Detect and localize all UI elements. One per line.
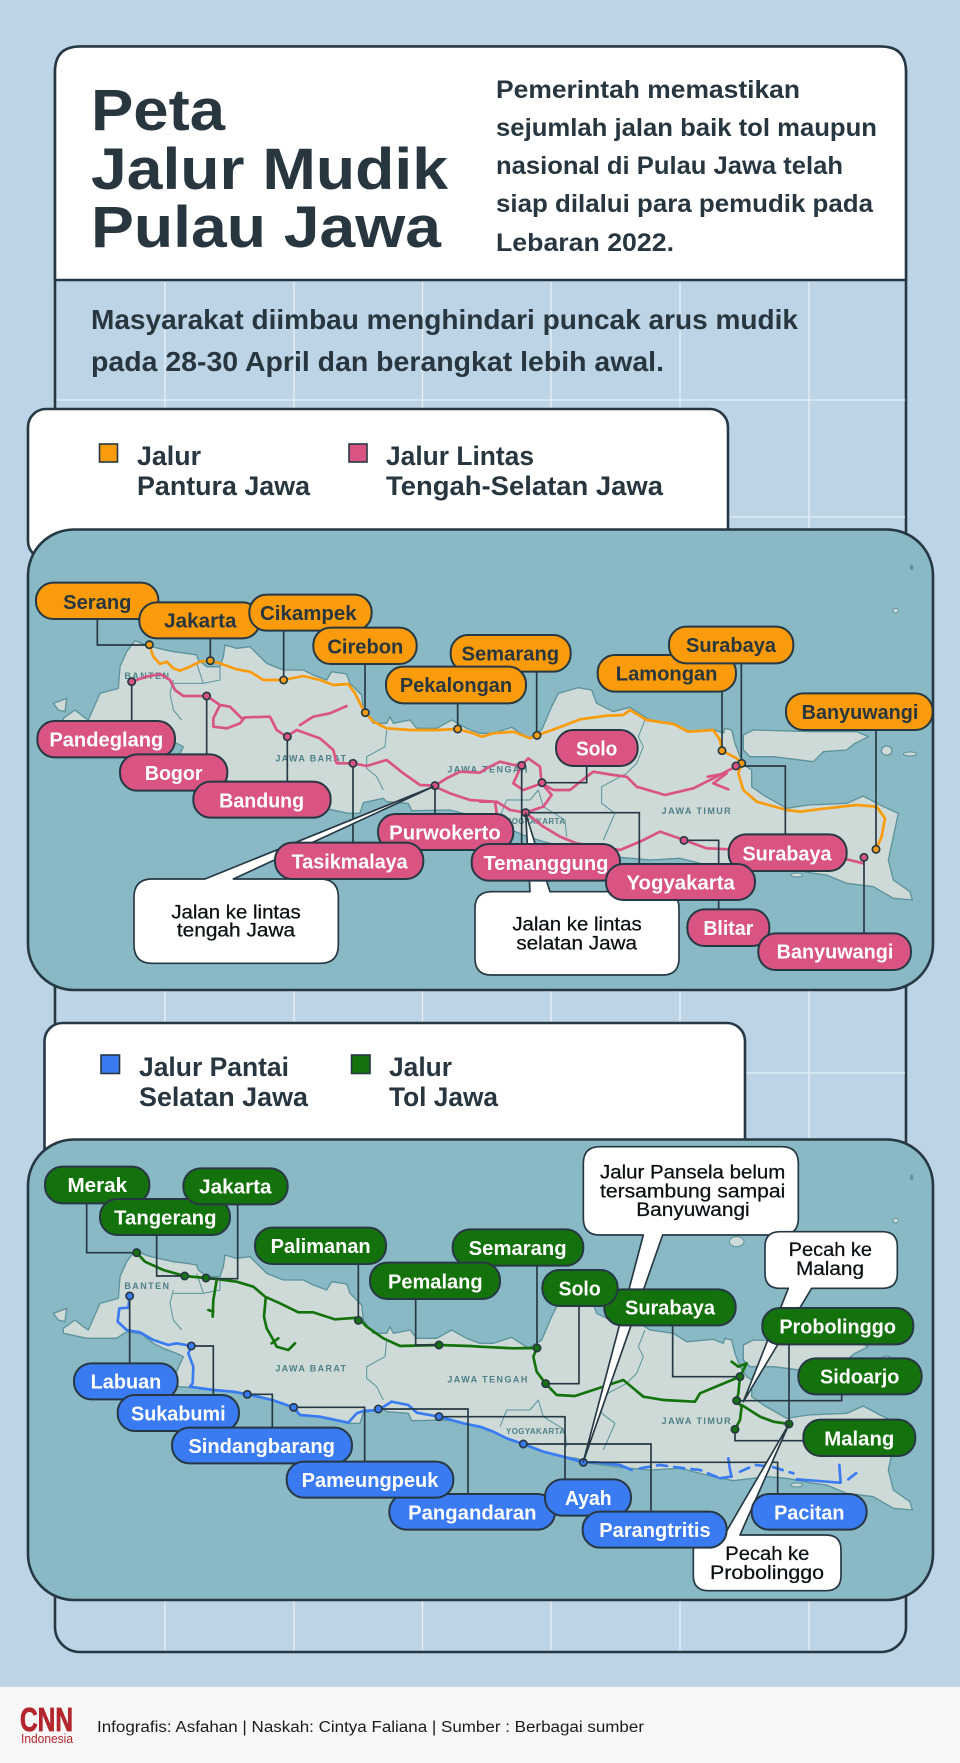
label: Temanggung	[472, 844, 620, 881]
label: Solo	[556, 730, 638, 766]
credits: Infografis: Asfahan | Naskah: Cintya Faliana | Sumber : Berbagai sumber	[97, 1719, 644, 1736]
label: Tasikmalaya	[275, 843, 423, 879]
label: Probolinggo	[762, 1308, 913, 1344]
label: Jakarta	[139, 602, 260, 638]
route nodes: pink	[128, 678, 868, 861]
label: Cirebon: Cirebon	[327, 637, 403, 659]
province labels: JAWA BARAT	[275, 1364, 346, 1374]
label: Banyuwangi	[758, 933, 911, 970]
label: Jakarta: Jakarta	[164, 611, 237, 633]
label: Surabaya: Surabaya	[686, 635, 777, 657]
label: Sindangbarang: Sindangbarang	[188, 1436, 335, 1458]
label: Serang: Serang	[63, 592, 131, 614]
label: Blitar: Blitar	[703, 918, 754, 940]
label: Pameungpeuk: Pameungpeuk	[302, 1470, 439, 1492]
label: Pemalang: Pemalang	[388, 1271, 483, 1293]
callout: Pecah ke Malang: Malang	[796, 1259, 864, 1280]
province labels: YOGYAKARTA	[506, 817, 565, 826]
province labels: JAWA BARAT	[275, 754, 346, 764]
logo: CNN Indonesia	[20, 1701, 73, 1746]
label: Tasikmalaya: Tasikmalaya	[292, 851, 409, 873]
province labels: BANTEN	[124, 1281, 169, 1291]
legend text: Jalur Tol Jawa	[389, 1052, 498, 1112]
province labels: JAWA TENGAH	[447, 1375, 527, 1385]
callout: Jalan ke lintas tengah Jawa	[134, 787, 433, 963]
label: Bogor: Bogor	[145, 763, 203, 785]
label: Malang: Malang	[824, 1428, 894, 1450]
title: Peta	[91, 78, 226, 143]
province labels: JAWA TENGAH	[447, 765, 527, 775]
label: Pekalongan	[386, 667, 526, 703]
footer	[0, 1687, 960, 1763]
label: Yogyakarta	[606, 864, 755, 900]
label: Bogor	[120, 754, 227, 791]
label: Ayah	[545, 1479, 631, 1516]
route: lintas tengah-selatan pink	[132, 674, 863, 863]
callout: Jalur Pansela belum tersambung sampai Banyuwangi: Banyuwangi	[636, 1200, 750, 1221]
label: Surabaya	[669, 627, 793, 663]
label: Cikampek: Cikampek	[260, 603, 358, 625]
logo: CNN Indonesia: Indonesia	[21, 1732, 73, 1746]
label: Lamongan: Lamongan	[616, 664, 717, 686]
label: Pekalongan: Pekalongan	[400, 675, 512, 697]
legend text: Jalur Tol Jawa: Tol Jawa	[389, 1082, 498, 1112]
label: Malang	[803, 1420, 915, 1456]
legend text: Jalur Lintas Tengah-Selatan Jawa: Tengah-Selatan Jawa	[386, 471, 663, 501]
label: Cikampek	[249, 595, 372, 631]
legend text: Jalur Pantai Selatan Jawa: Selatan Jawa	[139, 1082, 308, 1112]
label: Solo: Solo	[576, 739, 617, 761]
label: Sidoarjo	[798, 1358, 922, 1394]
province labels: JAWA TIMUR	[662, 806, 731, 816]
label: Labuan	[74, 1363, 178, 1399]
province labels: YOGYAKARTA	[506, 1427, 565, 1436]
label: Labuan: Labuan	[91, 1372, 161, 1394]
intro paragraph: Lebaran 2022.	[496, 229, 674, 257]
label: Banyuwangi: Banyuwangi	[802, 702, 918, 724]
callout: Jalan ke lintas selatan Jawa	[475, 813, 679, 975]
legend text: Jalur Pantura Jawa: Pantura Jawa	[137, 471, 310, 501]
route nodes: orange	[146, 641, 880, 853]
route: tol green	[137, 1253, 789, 1429]
label: Palimanan: Palimanan	[271, 1236, 371, 1258]
province labels: JAWA TIMUR	[662, 1416, 731, 1426]
label: Jakarta	[183, 1168, 288, 1204]
label: Sidoarjo: Sidoarjo	[820, 1367, 899, 1389]
route nodes: green	[133, 1249, 793, 1433]
intro paragraph: sejumlah jalan baik tol maupun	[496, 114, 877, 142]
label: Sindangbarang	[172, 1428, 352, 1463]
callout: Jalur Pansela belum tersambung sampai Banyuwangi: tersambung sampai	[600, 1181, 785, 1202]
header panel	[55, 46, 906, 280]
label: Cirebon	[313, 628, 417, 664]
callout: Jalur Pansela belum tersambung sampai Banyuwangi: Jalur Pansela belum	[600, 1162, 785, 1183]
callout: Pecah ke Probolinggo: Probolinggo	[710, 1563, 824, 1584]
map panel 2: pantai selatan and tol	[28, 1140, 933, 1600]
label: Surabaya: Surabaya	[742, 843, 832, 865]
legend swatch: orange	[100, 444, 118, 462]
label: Surabaya	[729, 834, 847, 871]
label: Tangerang	[100, 1199, 230, 1235]
route: pantura orange	[149, 645, 885, 849]
connector lines	[97, 619, 876, 933]
label: Surabaya: Surabaya	[625, 1297, 716, 1319]
legend text: Jalur Pantura Jawa: Jalur	[137, 441, 201, 471]
callout: Pecah ke Malang: Pecah ke	[789, 1240, 872, 1261]
label: Palimanan	[255, 1228, 386, 1264]
label: Pangandaran	[389, 1494, 555, 1530]
label: Banyuwangi: Banyuwangi	[777, 942, 893, 964]
label: Pangandaran: Pangandaran	[408, 1502, 536, 1524]
label: Purwokerto: Purwokerto	[389, 822, 501, 844]
label: Pacitan	[752, 1494, 867, 1530]
label: Pemalang	[370, 1263, 500, 1299]
logo: CNN Indonesia: CNN	[20, 1701, 73, 1738]
province labels	[124, 671, 731, 826]
label: Lamongan	[598, 655, 736, 692]
intro paragraph	[496, 76, 877, 257]
label: Yogyakarta: Yogyakarta	[626, 872, 736, 894]
label: Sukabumi	[118, 1395, 239, 1431]
label: Merak	[45, 1167, 149, 1203]
label: Temanggung: Temanggung	[483, 853, 608, 875]
label: Bandung	[193, 782, 331, 818]
callout: Jalan ke lintas tengah Jawa: Jalan ke lintas	[171, 902, 301, 923]
legend swatch: pink	[349, 444, 367, 462]
label: Merak: Merak	[67, 1175, 128, 1197]
label: Bandung: Bandung	[219, 790, 304, 812]
connector lines	[87, 1203, 842, 1512]
label: Ayah: Ayah	[565, 1488, 612, 1510]
legend text: Jalur Lintas Tengah-Selatan Jawa: Jalur Lintas	[386, 441, 534, 471]
legend text: Jalur Pantai Selatan Jawa	[139, 1052, 308, 1112]
label: Probolinggo: Probolinggo	[779, 1316, 896, 1338]
callout: Jalur Pansela belum tersambung sampai Banyuwangi	[583, 1147, 798, 1462]
callout: Jalan ke lintas selatan Jawa: selatan Jawa	[516, 933, 637, 954]
label: Solo: Solo	[559, 1278, 601, 1300]
intro paragraph: siap dilalui para pemudik pada	[496, 190, 874, 218]
label: Purwokerto	[378, 814, 513, 850]
callout: Jalan ke lintas tengah Jawa: tengah Jawa	[177, 921, 296, 942]
label: Blitar	[687, 909, 769, 946]
label: Pameungpeuk	[287, 1462, 453, 1498]
subheading: pada 28-30 April dan berangkat lebih awal.	[91, 346, 664, 377]
label: Serang	[36, 583, 158, 619]
intro paragraph: nasional di Pulau Jawa telah	[496, 152, 843, 180]
title	[91, 78, 449, 260]
intro paragraph: Pemerintah memastikan	[496, 76, 800, 104]
label: Semarang: Semarang	[461, 644, 559, 666]
callout: Pecah ke Probolinggo: Pecah ke	[725, 1544, 809, 1565]
legend text: Jalur Lintas Tengah-Selatan Jawa	[386, 441, 663, 501]
label: Surabaya	[604, 1289, 736, 1325]
label: Semarang	[453, 1229, 583, 1266]
route nodes: blue	[126, 1292, 587, 1466]
title: Pulau Jawa	[91, 195, 442, 260]
subheading: Masyarakat diimbau menghindari puncak arus mudik	[91, 304, 799, 335]
legend swatch: blue	[101, 1055, 120, 1074]
title: Jalur Mudik	[91, 137, 449, 202]
label: Solo	[542, 1270, 618, 1306]
legend swatch: green	[352, 1055, 370, 1074]
label: Pacitan: Pacitan	[774, 1502, 844, 1524]
label: Jakarta: Jakarta	[199, 1177, 272, 1199]
callout: Pecah ke Probolinggo	[693, 1424, 841, 1591]
label: Banyuwangi	[786, 693, 933, 730]
label: Parangtritis: Parangtritis	[599, 1520, 711, 1542]
label: Parangtritis	[583, 1512, 727, 1548]
map panel 1: pantura and lintas tengah-selatan	[28, 530, 933, 990]
subheading	[91, 304, 799, 377]
label: Sukabumi: Sukabumi	[131, 1403, 226, 1425]
legend text: Jalur Tol Jawa: Jalur	[389, 1052, 452, 1082]
label: Pandeglang	[37, 721, 175, 757]
label: Tangerang: Tangerang	[114, 1207, 216, 1229]
legend text: Jalur Pantura Jawa	[137, 441, 310, 501]
label: Semarang: Semarang	[469, 1238, 567, 1260]
legend text: Jalur Pantai Selatan Jawa: Jalur Pantai	[139, 1052, 289, 1082]
route: pantai selatan blue	[118, 1296, 861, 1483]
label: Pandeglang: Pandeglang	[49, 730, 163, 752]
legend panel: pantai selatan and tol	[44, 1023, 745, 1173]
legend panel: pantura and lintas tengah-selatan	[28, 409, 728, 559]
callout: Pecah ke Malang	[743, 1232, 897, 1402]
province labels: BANTEN	[124, 671, 169, 681]
province labels	[124, 1281, 731, 1436]
callout: Jalan ke lintas selatan Jawa: Jalan ke lintas	[512, 915, 642, 936]
label: Semarang	[451, 635, 571, 672]
